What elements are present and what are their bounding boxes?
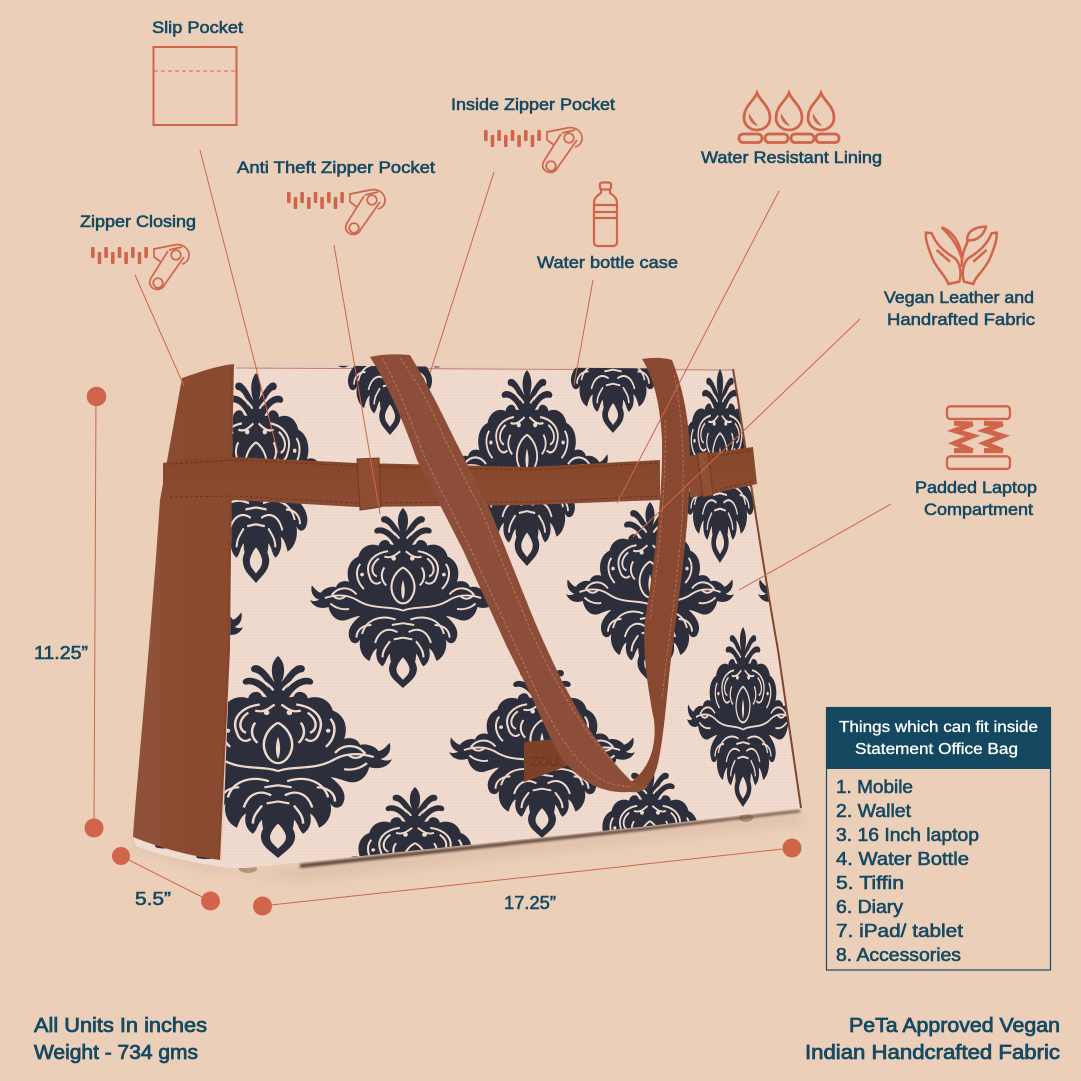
strap left crossing [370,354,650,792]
damask print [73,255,926,957]
list of items: 6. Diary [836,897,903,917]
icon: padded laptop spring [947,406,1010,469]
icon: water bottle [594,182,617,246]
label: vegan leather and handcrafted fabric [884,288,1036,329]
strap left stitching [382,358,632,787]
side bottom sliver [133,836,248,868]
front fabric panel [222,365,801,868]
brand tag [524,738,570,782]
list of items: 1. Mobile [836,777,913,797]
brand tag: ZOU [531,754,558,769]
footer left: units and weight: All Units In inches [34,1015,207,1037]
bag feet [239,814,753,873]
list of items: 8. Accessories [836,945,961,965]
dimension: height 11.25: 11.25” [34,643,88,663]
strap right stitching [662,375,683,700]
icon: inside zipper [484,128,582,172]
label: padded laptop compartment: Padded Laptop [915,478,1037,497]
belt loop right [697,452,713,497]
dimension: depth 5.5 [112,847,220,910]
list of items: 5. Tiffin [836,873,904,893]
list of items: 4. Water Bottle [836,849,969,869]
footer right: vegan and handcrafted [805,1015,1060,1064]
footer left: units and weight: Weight - 734 gms [34,1042,198,1064]
label: water resistant lining: Water Resistant Lining [701,148,882,167]
panel heading text: Things which can fit inside [839,719,1038,736]
strap right [628,358,690,790]
panel heading text: Statement Office Bag [855,741,1018,758]
leader line: slip pocket [200,150,278,453]
label: anti theft zipper pocket: Anti Theft Zipper Pocket [237,158,435,177]
label: vegan leather and handcrafted fabric: Handrafted Fabric [887,310,1036,329]
bag product photo illustration [133,354,802,880]
fabric top edge [234,365,733,369]
icon: anti theft zipper [287,190,385,234]
ground shadow under bag [130,812,806,880]
panel header [826,707,1051,769]
dimension: width 17.25 [253,838,802,916]
icon: slip pocket [154,47,236,125]
dimension: width 17.25: 17.25” [504,893,556,913]
label: vegan leather and handcrafted fabric: Vegan Leather and [884,288,1034,307]
leader line: water bottle case [574,280,593,385]
dimension: depth 5.5: 5.5” [135,889,171,909]
belt loop left [357,458,381,510]
panel: things which can fit inside [826,707,1051,970]
left side leather panel [133,364,234,860]
list of items: 7. iPad/ tablet [836,921,963,941]
label: padded laptop compartment [915,478,1037,519]
side panel seam [219,368,232,856]
panel heading text [839,719,1038,758]
list of items: 3. 16 Inch laptop [836,825,979,845]
leader line: inside zipper pocket [430,172,494,373]
label: slip pocket: Slip Pocket [152,18,243,37]
dark shadow along bag base [300,810,800,868]
belt stitching [170,451,754,503]
icon: water resistant drops [739,93,839,142]
leader line: anti theft zipper pocket [334,245,380,514]
leader line: zipper closing [135,275,184,386]
footer left: units and weight [34,1015,207,1064]
list of items [836,777,979,965]
footer right: vegan and handcrafted: Indian Handcrafted Fabric [805,1042,1060,1064]
right brown edge [733,369,801,808]
leather belt [163,457,660,507]
leader line: water resistant lining [617,191,779,503]
list of items: 2. Wallet [836,801,911,821]
label: water bottle case: Water bottle case [537,253,678,272]
icon: zipper closing [91,245,189,289]
label: inside zipper pocket: Inside Zipper Pocket [451,95,615,114]
dimension: height 11.25 [34,387,106,838]
leader line: padded laptop compartment [739,504,891,590]
leader line: vegan leather [633,319,860,537]
label: padded laptop compartment: Compartment [924,500,1033,519]
label: zipper closing: Zipper Closing [80,212,196,231]
footer right: vegan and handcrafted: PeTa Approved Vegan [849,1015,1060,1037]
icon: hands with leaf [926,227,997,284]
